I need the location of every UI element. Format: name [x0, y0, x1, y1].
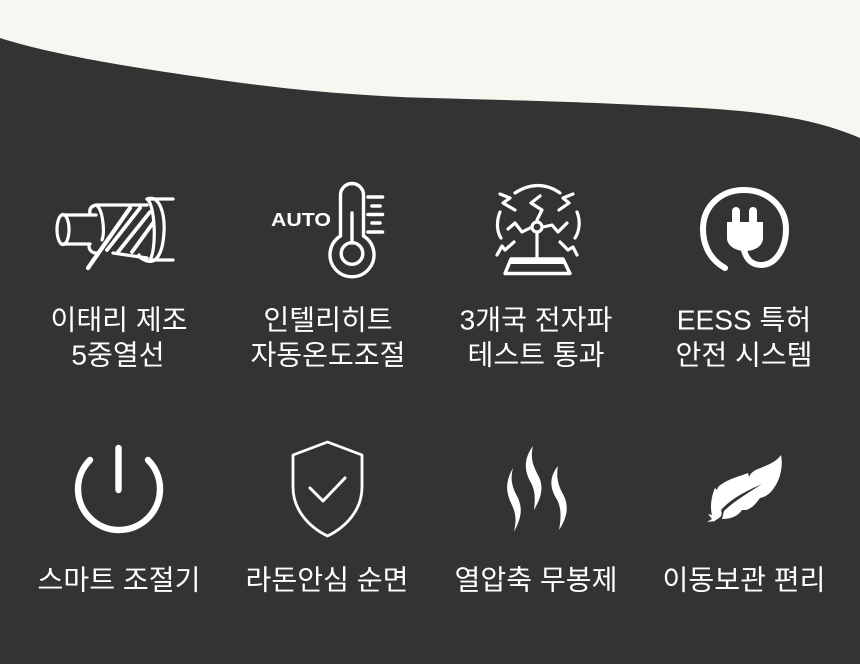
label: smart controller: 스마트 조절기 [38, 565, 200, 596]
icon: AUTO thermometer [271, 184, 382, 277]
icon: plug in cord circle [703, 190, 786, 268]
label: thermostat: 자동온도조절 [250, 340, 406, 370]
label: safety system: EESS 특허 [677, 305, 811, 336]
label: radon safe: 라돈안심 순면 [246, 565, 408, 596]
label: portable storage: 이동보관 편리 [663, 565, 825, 596]
icon: plasma ball [497, 186, 579, 274]
label: EMF test: 테스트 통과 [467, 340, 605, 370]
label: no compression agent: 열압축 무봉제 [455, 565, 617, 596]
icon: wire spool [57, 198, 173, 268]
label: thermostat: 인텔리히트 [263, 305, 393, 336]
label: safety system: 안전 시스템 [675, 340, 813, 370]
icon: heat waves [507, 446, 567, 532]
icon: power [78, 448, 160, 530]
icon: feather [707, 455, 782, 525]
AUTO label: AUTO [271, 209, 331, 230]
label: wire: 이태리 제조 [50, 305, 188, 336]
thermometer [330, 184, 382, 277]
label: EMF test: 3개국 전자파 [460, 305, 612, 336]
icon: shield check [293, 442, 362, 536]
top cream curved band [0, 0, 860, 138]
label: wire: 5중열선 [71, 340, 165, 370]
